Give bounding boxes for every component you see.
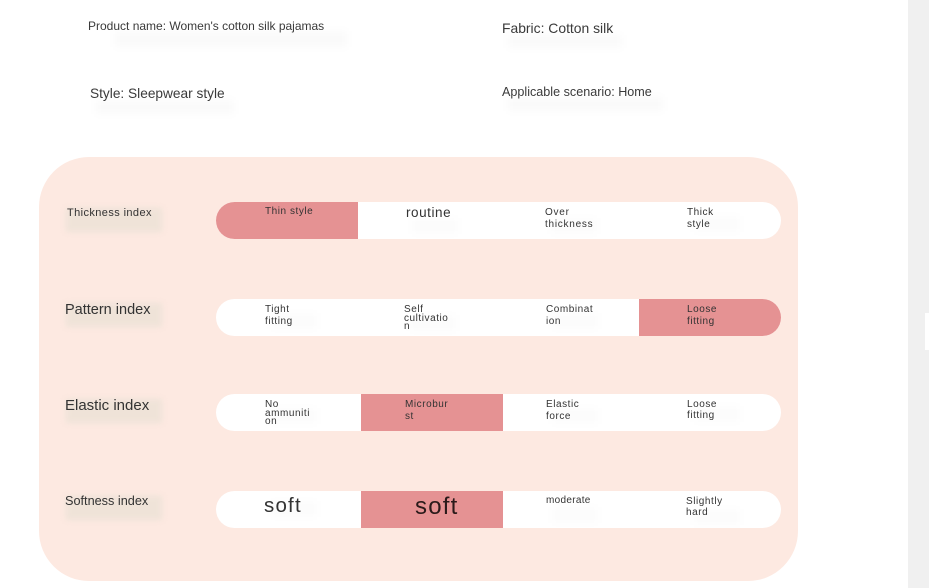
option: no ammunition: ammuniti — [265, 408, 310, 418]
option: thick style: style — [687, 219, 710, 230]
row: pattern index — [65, 299, 781, 336]
option: loose fitting — [687, 399, 717, 421]
spec: style: Style: Sleepwear style — [90, 86, 225, 101]
option: thick style: Thick — [687, 207, 714, 218]
option: loose fitting: Loose — [687, 399, 717, 410]
label: thickness index: Thickness index — [67, 207, 152, 219]
option: thick style — [687, 207, 714, 230]
option: over thickness: thickness — [545, 219, 593, 230]
option: tight fitting — [265, 304, 293, 327]
row: thickness index — [66, 202, 781, 239]
selected option: loose fitting: Loose — [687, 304, 717, 315]
spec: product name: Product name: Women's cotton silk pajamas — [88, 19, 324, 33]
option: no ammunition — [265, 399, 310, 427]
right side scrollbar strip — [908, 0, 929, 588]
selected option: loose fitting: fitting — [687, 316, 715, 327]
option: elastic force: Elastic — [546, 399, 579, 410]
scale: softness options — [216, 491, 781, 528]
option: tight fitting: Tight — [265, 304, 290, 315]
option: no ammunition: on — [265, 416, 277, 427]
scale: elastic options — [216, 394, 781, 431]
option: slightly hard: hard — [686, 507, 708, 518]
label: softness index: Softness index — [65, 494, 148, 508]
selected option: microburst: Microbur — [405, 399, 448, 410]
row: elastic index — [65, 394, 781, 431]
selected option: soft: soft — [415, 493, 458, 520]
spec: fabric: Fabric: Cotton silk — [502, 20, 613, 36]
option: routine: routine — [406, 205, 451, 220]
option: elastic force — [546, 399, 579, 422]
scale: pattern options — [216, 299, 781, 336]
option: slightly hard: Slightly — [686, 496, 723, 507]
option: combination: ion — [546, 316, 561, 327]
option: self cultivation: n — [404, 321, 410, 332]
scale: thickness options — [216, 202, 781, 239]
row: softness index — [65, 491, 781, 528]
option: soft: soft — [264, 494, 302, 517]
option: no ammunition: No — [265, 399, 279, 410]
panel: index table — [39, 157, 798, 581]
label: pattern index: Pattern index — [65, 302, 150, 318]
option: self cultivation — [404, 304, 448, 332]
selected option: microburst — [405, 399, 448, 422]
option: loose fitting: fitting — [687, 410, 715, 421]
option: combination: Combinat — [546, 304, 593, 315]
option: combination — [546, 304, 593, 327]
option: over thickness: Over — [545, 207, 570, 218]
option: self cultivation: Self — [404, 304, 423, 315]
option: self cultivation: cultivatio — [404, 312, 448, 324]
selected option: microburst: st — [405, 411, 414, 422]
label: elastic index: Elastic index — [65, 397, 149, 414]
selected option: loose fitting — [687, 304, 717, 327]
option: over thickness — [545, 207, 593, 230]
option: slightly hard — [686, 496, 723, 518]
spec: applicable scenario: Applicable scenario: Home — [502, 85, 652, 99]
option: tight fitting: fitting — [265, 316, 293, 327]
option: elastic force: force — [546, 410, 571, 422]
option: moderate: moderate — [546, 495, 591, 506]
selected option: thin style: Thin style — [265, 206, 313, 217]
